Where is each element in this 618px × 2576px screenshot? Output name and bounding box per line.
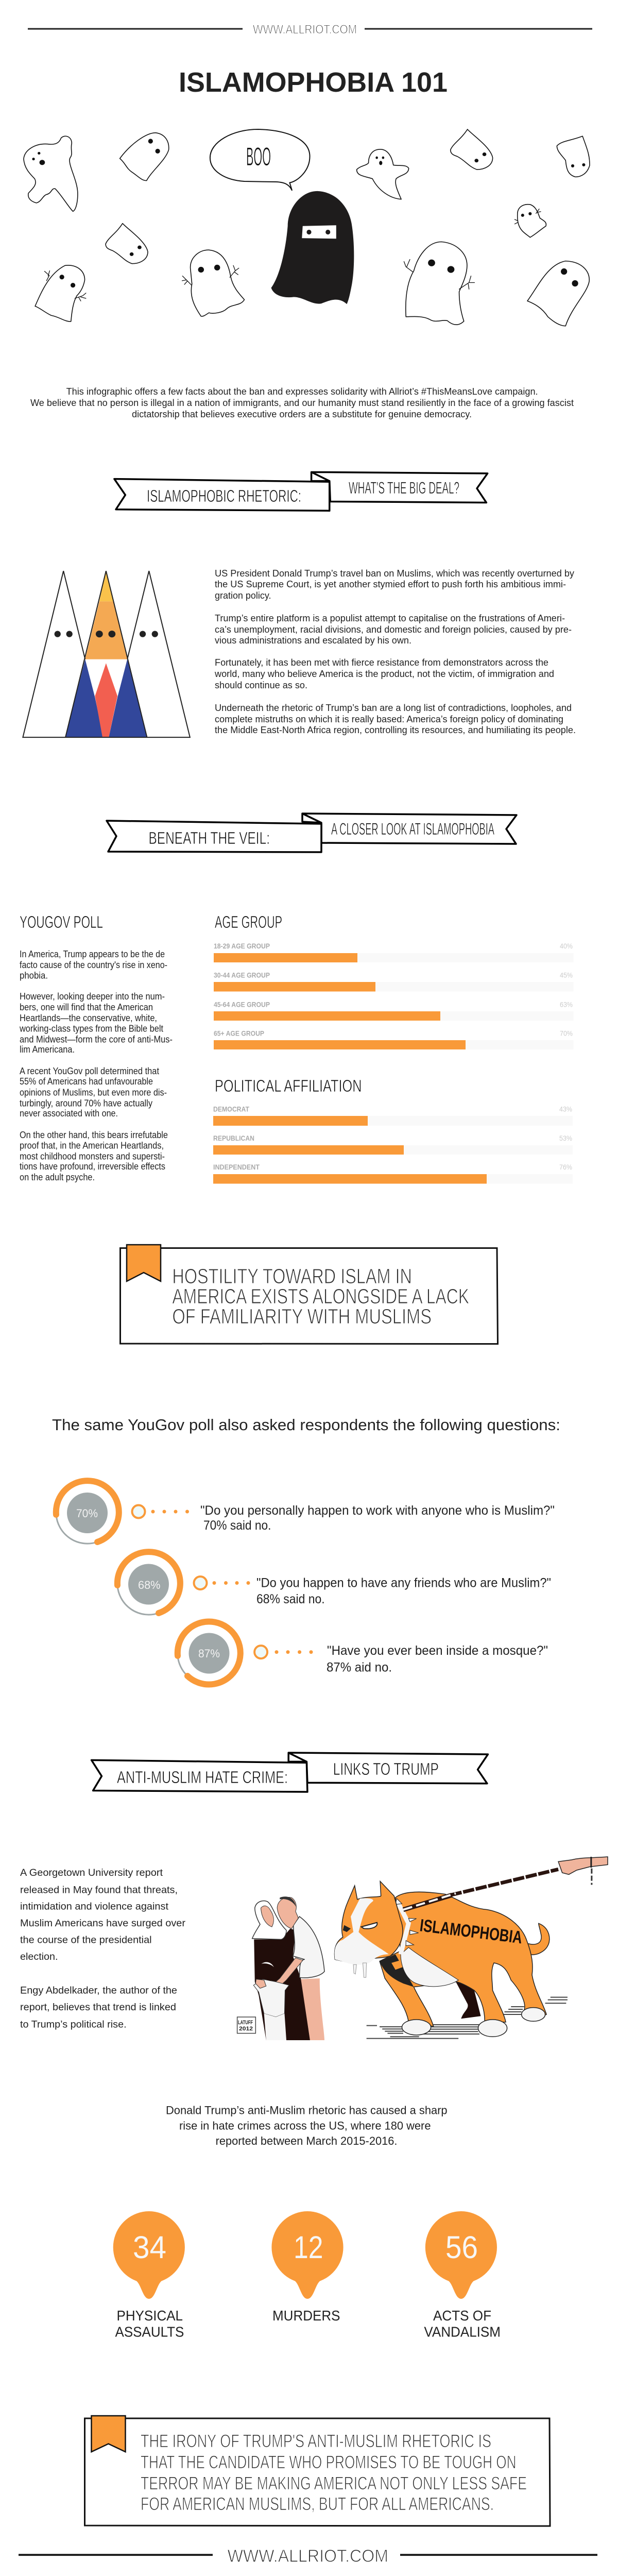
section banner: Islamophobic rhetoric <box>114 472 488 511</box>
figure: dog paws <box>402 2008 545 2037</box>
donut stat: 68% <box>117 1552 551 1615</box>
text block: hate crimes: rise in hate crimes across the US, where 180 were <box>179 2120 431 2132</box>
donut stat: 70% <box>56 1481 555 1544</box>
dog label: ISLAMOPHOBIA <box>419 1916 523 1947</box>
section banner: Beneath the veil <box>107 814 517 852</box>
section banner: anti-Muslim hate crime: ANTI-MUSLIM HATE CRIME: <box>117 1768 288 1787</box>
text block: YouGov poll: most childhood monsters and supersti- <box>20 1151 165 1161</box>
icon: orange bookmark <box>127 1245 161 1281</box>
ground shading <box>367 1997 568 2039</box>
text block: rhetoric: vious administrations and escalated by his own. <box>215 635 411 646</box>
icon: ghost top right <box>451 129 493 170</box>
illustration: family and chained Islamophobia dog <box>237 1857 608 2040</box>
title: ISLAMOPHOBIA 101 <box>179 67 448 98</box>
stat pin: murders <box>271 2211 344 2324</box>
figure: hand holding the chain <box>558 1857 608 1885</box>
donut stat: 68%: 68% said no. <box>256 1592 325 1606</box>
header site line: WWW.ALLRIOT.COM <box>253 23 357 37</box>
text block: hate crimes: Donald Trump’s anti-Muslim rhetoric has caused a sharp <box>166 2104 448 2117</box>
bar chart: age group <box>214 942 574 1049</box>
icon: large ghost top left <box>24 136 78 211</box>
text block: Georgetown report <box>20 1867 186 2030</box>
bar chart: age group: 45% <box>560 971 573 979</box>
text block: Georgetown report: Muslim Americans have surged over <box>20 1918 186 1929</box>
stat pin: murders: MURDERS <box>272 2308 340 2324</box>
stat pin: acts of vandalism: ACTS OF <box>433 2308 491 2324</box>
text block: YouGov poll: lim Americana. <box>20 1044 75 1055</box>
bar chart: political affiliation: 76% <box>559 1163 572 1171</box>
donut stat: 87%: 87% <box>198 1647 220 1660</box>
callout: hostility toward Islam: AMERICA EXISTS ALONGSIDE A LACK <box>172 1284 469 1308</box>
signature text <box>238 2020 253 2032</box>
donut stat: 87%: "Have you ever been inside a mosque?" <box>327 1643 548 1658</box>
text block: Georgetown report: to Trump’s political rise. <box>20 2019 127 2030</box>
footer site line <box>19 2546 597 2566</box>
icon: speech bubble <box>210 129 310 191</box>
icon: ghost far right <box>557 136 590 177</box>
donut stat: 87%: 87% aid no. <box>327 1660 392 1674</box>
section banner: Beneath the veil: BENEATH THE VEIL: <box>148 828 270 848</box>
text block: rhetoric: Fortunately, it has been met with fierce resistance from demonstrators across the <box>215 657 548 668</box>
bar chart: political affiliation: DEMOCRAT <box>213 1105 249 1113</box>
text block: hate crimes: reported between March 2015-2016. <box>216 2134 397 2147</box>
donut stat: 68%: "Do you happen to have any friends who are Muslim?" <box>256 1576 551 1590</box>
text block: Georgetown report: election. <box>20 1951 58 1962</box>
icon: waving ghost bottom left <box>35 265 86 321</box>
text block: Georgetown report: the course of the presidential <box>20 1934 152 1945</box>
figure: chain leash <box>403 1869 558 1910</box>
bar chart: political affiliation <box>213 1105 573 1184</box>
stat pin: physical assaults: PHYSICAL <box>116 2308 183 2324</box>
intro text <box>30 386 574 419</box>
text block: rhetoric: Trump’s entire platform is a populist attempt to capitalise on the frustrations of Ameri- <box>215 613 565 623</box>
footer site line: WWW.ALLRIOT.COM <box>228 2546 388 2566</box>
callout: irony of anti-Muslim rhetoric <box>84 2416 550 2526</box>
section banner: anti-Muslim hate crime <box>92 1753 488 1792</box>
bar chart: political affiliation: INDEPENDENT <box>213 1163 260 1171</box>
bar chart: age group: 45-64 AGE GROUP <box>214 1001 270 1009</box>
figure: dog head <box>335 1882 403 1964</box>
donut stat: 70%: 70% said no. <box>203 1518 271 1533</box>
text block: rhetoric: US President Donald Trump’s travel ban on Muslims, which was recently overturned by <box>215 568 574 579</box>
figure: dog body <box>380 1892 546 2026</box>
text block: YouGov poll: tions have profound, irreversible effects <box>20 1161 165 1172</box>
text block: Georgetown report: intimidation and violence against <box>20 1901 169 1912</box>
stat pin: acts of vandalism: 56 <box>445 2230 478 2265</box>
stat pin: physical assaults <box>113 2211 185 2340</box>
donut stat: 70%: 70% <box>76 1507 98 1520</box>
text block: YouGov poll: On the other hand, this bears irrefutable <box>20 1130 168 1140</box>
text block: Georgetown report: A Georgetown University report <box>20 1867 163 1878</box>
text block: rhetoric: complete mistruths on which it is really based: America’s foreign policy of dominating <box>215 714 563 724</box>
figure: spiked collar <box>398 1903 408 1954</box>
text block: YouGov poll: In America, Trump appears to be the de <box>20 949 165 959</box>
donut stat: 70%: "Do you personally happen to work with anyone who is Muslim?" <box>200 1503 555 1518</box>
text block: rhetoric: the Middle East-North Africa region, controlling its resources, and humiliating its people. <box>215 725 576 735</box>
donut stat: 68%: 68% <box>138 1579 161 1591</box>
text block: rhetoric: gration policy. <box>215 590 271 601</box>
text block: YouGov poll: However, looking deeper into the num- <box>20 991 165 1002</box>
heading: poll questions: The same YouGov poll also asked respondents the following questions: <box>52 1416 560 1434</box>
signature box <box>237 2017 255 2033</box>
icon: ghost <box>120 133 169 181</box>
text block: rhetoric: ca’s unemployment, racial divisions, and domestic and foreign policies, caused by pre- <box>215 624 572 635</box>
heading: age group: AGE GROUP <box>215 912 282 931</box>
text block: YouGov poll: proof that, in the American Heartlands, <box>20 1141 164 1151</box>
intro text: dictatorship that believes executive orders are a substitute for genuine democracy. <box>132 409 472 419</box>
signature text: LATUFF <box>238 2020 253 2026</box>
callout: irony of anti-Muslim rhetoric: THE IRONY OF TRUMP'S ANTI-MUSLIM RHETORIC IS <box>141 2431 491 2451</box>
icon: orange bookmark <box>92 2416 126 2452</box>
figure: man's leg and family <box>252 1896 324 2040</box>
text block: YouGov poll: turbingly, around 70% have actually <box>20 1098 152 1109</box>
text block: YouGov poll: phobia. <box>20 971 48 981</box>
heading: YouGov poll: YOUGOV POLL <box>20 912 103 931</box>
text block: hate crimes <box>166 2104 448 2147</box>
text block: rhetoric: should continue as so. <box>215 680 307 690</box>
text block: Georgetown report: released in May found that threats, <box>20 1885 178 1896</box>
text block: YouGov poll: never associated with one. <box>20 1108 118 1118</box>
text block: YouGov poll: on the adult psyche. <box>20 1172 95 1182</box>
text block: YouGov poll: and Midwest—form the core of anti-Mus- <box>20 1035 173 1045</box>
section banner: Islamophobic rhetoric: ISLAMOPHOBIC RHETORIC: <box>147 486 301 505</box>
text block: YouGov poll: 55% of Americans had unfavourable <box>20 1076 153 1087</box>
bar chart: age group: 63% <box>560 1001 573 1009</box>
text block: YouGov poll: opinions of Muslims, but even more dis- <box>20 1087 167 1097</box>
header site line <box>28 23 592 37</box>
intro text: We believe that no person is illegal in a nation of immigrants, and our humanity must stand resiliently in the face of a growing fascist <box>30 398 574 408</box>
figure: dog collar tag <box>391 1959 407 1970</box>
icon: ghost mid left <box>106 224 148 264</box>
illustration: three hoods with Trump-coloured centre <box>23 571 190 737</box>
icon: waving ghost large <box>404 242 474 325</box>
figure: dog white chest <box>401 1947 458 1987</box>
figure: dog tail <box>524 1923 550 1955</box>
stat pin: acts of vandalism <box>424 2211 501 2340</box>
bar chart: age group: 30-44 AGE GROUP <box>214 971 270 979</box>
heading: political affiliation: POLITICAL AFFILIATION <box>215 1076 362 1095</box>
intro text: This infographic offers a few facts about the ban and expresses solidarity with Allriot’s #ThisMeansLove campaign. <box>66 386 538 397</box>
text block: rhetoric <box>214 568 576 735</box>
bar chart: age group: 18-29 AGE GROUP <box>214 942 270 950</box>
signature text: 2012 <box>239 2026 253 2032</box>
callout: hostility toward Islam: HOSTILITY TOWARD ISLAM IN <box>172 1264 412 1288</box>
donut stat: 87% <box>178 1622 548 1685</box>
section banner: Islamophobic rhetoric: WHAT'S THE BIG DEAL? <box>349 479 459 497</box>
text block: YouGov poll <box>19 949 173 1182</box>
bar chart: political affiliation: 53% <box>559 1134 572 1142</box>
stat pin: physical assaults: 34 <box>133 2230 166 2265</box>
callout: hostility toward Islam: OF FAMILIARITY WITH MUSLIMS <box>172 1304 432 1328</box>
section banner: Beneath the veil: A CLOSER LOOK AT ISLAMOPHOBIA <box>331 820 494 838</box>
icon: waving ghost centre <box>182 250 244 316</box>
text block: YouGov poll: A recent YouGov poll determined that <box>20 1066 159 1076</box>
icon: woman in black niqab <box>271 191 354 304</box>
text: BOO <box>246 142 271 171</box>
text block: rhetoric: the US Supreme Court, is yet another stymied effort to push forth his ambitious immi- <box>215 579 566 589</box>
text block: Georgetown report: Engy Abdelkader, the author of the <box>20 1985 177 1996</box>
bar chart: age group: 40% <box>560 942 573 950</box>
icon: small ghost <box>357 149 409 199</box>
bar chart: political affiliation: REPUBLICAN <box>213 1134 254 1142</box>
text block: YouGov poll: facto cause of the country's rise in xeno- <box>20 960 167 970</box>
text block: YouGov poll: working-class types from the Bible belt <box>19 1023 163 1033</box>
stat pin: acts of vandalism: VANDALISM <box>424 2324 501 2340</box>
figure: dog harness <box>380 1954 414 1987</box>
bar chart: age group: 65+ AGE GROUP <box>214 1029 264 1038</box>
stat pin: physical assaults: ASSAULTS <box>115 2324 184 2340</box>
icon: ghost bottom right <box>527 261 589 326</box>
section banner: anti-Muslim hate crime: LINKS TO TRUMP <box>333 1759 439 1778</box>
callout: hostility toward Islam <box>121 1245 497 1344</box>
text block: YouGov poll: bers, one will find that the American <box>20 1002 153 1012</box>
text block: YouGov poll: Heartlands—the conservative, white, <box>20 1013 157 1023</box>
stat pin: murders: 12 <box>294 2230 323 2265</box>
text block: rhetoric: Underneath the rhetoric of Trump’s ban are a long list of contradictions, loopholes, and <box>215 703 572 713</box>
callout: irony of anti-Muslim rhetoric: FOR AMERICAN MUSLIMS, BUT FOR ALL AMERICANS. <box>141 2494 494 2514</box>
text block: rhetoric: world, many who believe America is the product, not the victim, of immigration and <box>214 669 554 679</box>
bar chart: age group: 70% <box>560 1029 573 1038</box>
figure: dog far leg <box>456 1982 481 2019</box>
icon: tiny waving ghost <box>514 205 546 238</box>
illustration: ghosts surrounding a woman in niqab <box>24 129 590 326</box>
text block: Georgetown report: report, believes that trend is linked <box>20 2002 176 2013</box>
bar chart: political affiliation: 43% <box>559 1105 572 1113</box>
